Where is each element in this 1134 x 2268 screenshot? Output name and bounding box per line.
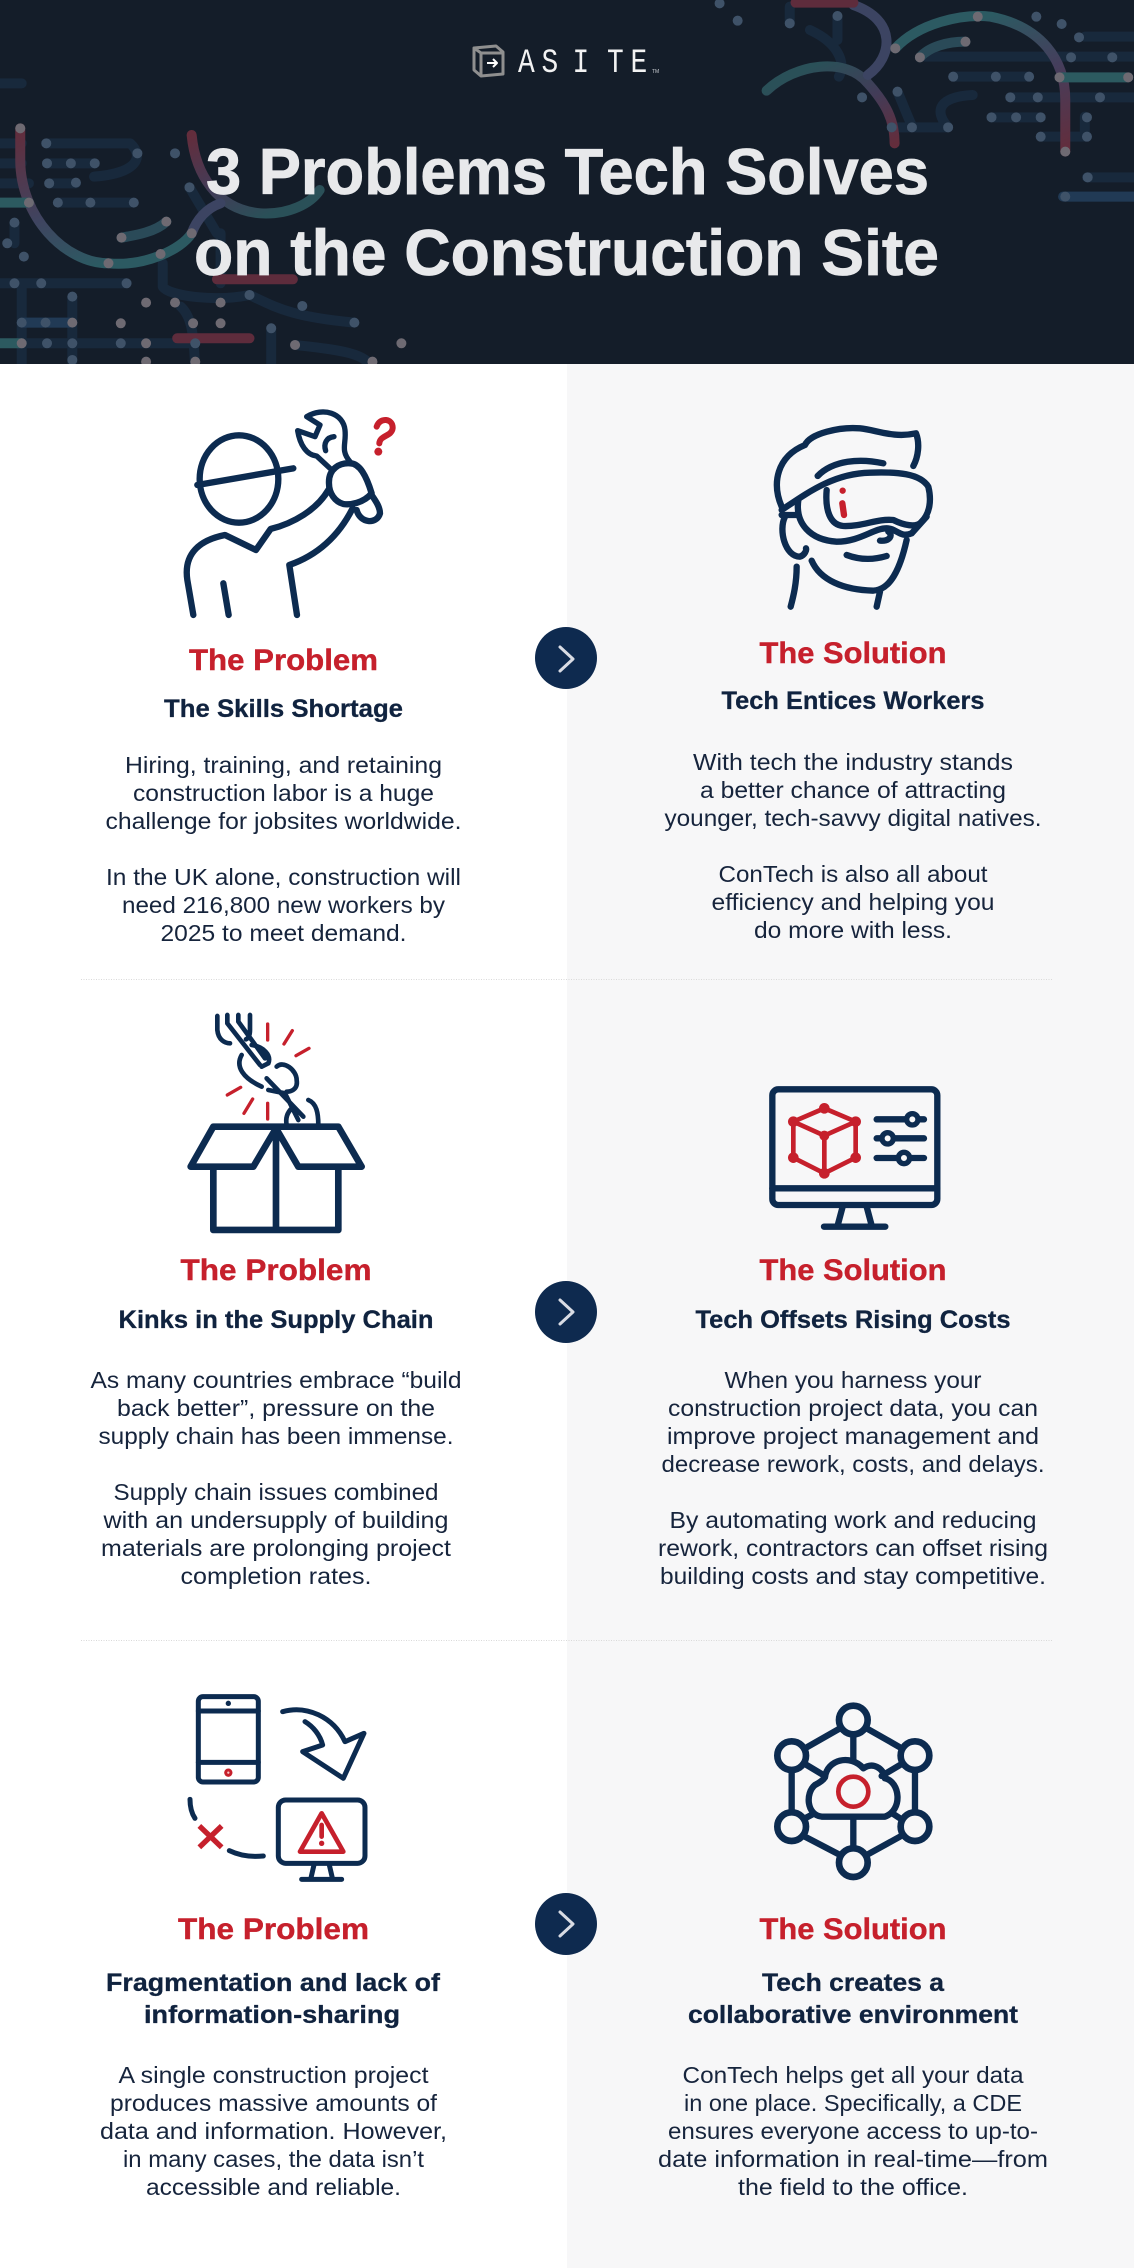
panel: header: [0, 0, 1134, 364]
heading: The Solution: [760, 1254, 946, 1287]
body text: building costs and stay competitive.: [660, 1563, 1046, 1589]
body text: completion rates.: [180, 1563, 372, 1589]
subheading: collaborative environment: [688, 2001, 1019, 2029]
body text: with an undersupply of building: [102, 1507, 448, 1533]
body text: By automating work and reducing: [670, 1507, 1036, 1533]
body text: rework, contractors can offset rising: [658, 1535, 1048, 1561]
body text: [658, 2062, 1048, 2200]
body text: ConTech helps get all your data: [682, 2062, 1024, 2088]
subheading: [688, 1969, 1019, 2029]
heading: The Problem: [178, 1913, 369, 1946]
body text: supply chain has been immense.: [98, 1423, 454, 1449]
panel: right column background: [567, 364, 1134, 2268]
body text: the field to the office.: [738, 2174, 968, 2200]
body text: a better chance of attracting: [700, 777, 1006, 803]
subheading: Tech creates a: [762, 1969, 945, 1997]
body text: [106, 752, 462, 946]
icon: broken chain and box: [191, 1015, 362, 1230]
body text: 2025 to meet demand.: [160, 920, 406, 946]
body text: back better”, pressure on the: [117, 1395, 435, 1421]
body text: [90, 1367, 461, 1589]
body text: younger, tech-savvy digital natives.: [664, 805, 1042, 831]
subheading: information-sharing: [144, 2001, 400, 2029]
heading: The Problem: [180, 1254, 372, 1287]
icon: logo cube: [474, 46, 503, 76]
arrow 3: [535, 1893, 597, 1955]
title: 3 Problems Tech Solves: [206, 135, 929, 208]
body text: in many cases, the data isn’t: [123, 2146, 424, 2172]
body text: When you harness your: [724, 1367, 982, 1393]
body text: decrease rework, costs, and delays.: [662, 1451, 1044, 1477]
body text: accessible and reliable.: [146, 2174, 401, 2200]
title: [194, 135, 939, 289]
icon: tablet, arrow, failed link, alert monitor: [190, 1697, 365, 1879]
subheading: Tech Offsets Rising Costs: [696, 1306, 1010, 1334]
body text: efficiency and helping you: [712, 889, 994, 915]
body text: challenge for jobsites worldwide.: [106, 808, 462, 834]
panel: solution 2: [658, 1089, 1048, 1589]
body text: in one place. Specifically, a CDE: [684, 2090, 1022, 2116]
body text: ConTech is also all about: [718, 861, 988, 887]
icon: monitor with cube and sliders: [772, 1089, 937, 1227]
logo: Asite: I: [572, 45, 589, 83]
logo: Asite: E: [630, 45, 647, 83]
panel: solution 3: [658, 1706, 1048, 2200]
body text: materials are prolonging project: [101, 1535, 451, 1561]
body text: do more with less.: [754, 917, 952, 943]
body text: construction project data, you can: [668, 1395, 1038, 1421]
panel: problem 3: [100, 1697, 447, 2200]
body text: As many countries embrace “build: [90, 1367, 461, 1393]
body text: [658, 1367, 1048, 1589]
body text: data and information. However,: [100, 2118, 447, 2144]
logo: Asite: S: [542, 45, 558, 83]
panel: solution 1: [664, 428, 1042, 943]
body text: improve project management and: [667, 1423, 1039, 1449]
body text: construction labor is a huge: [133, 780, 434, 806]
logo: Asite: TM: [652, 69, 659, 75]
body text: In the UK alone, construction will: [106, 864, 461, 890]
logo: Asite: [474, 45, 659, 83]
subheading: Tech Entices Workers: [722, 687, 984, 715]
body text: ensures everyone access to up-to-: [668, 2118, 1038, 2144]
heading: The Solution: [760, 1913, 946, 1946]
arrow 2: [535, 1281, 597, 1343]
title: on the Construction Site: [194, 216, 939, 289]
subheading: [106, 1969, 441, 2029]
logo: Asite: A: [518, 45, 535, 83]
heading: The Solution: [760, 637, 946, 670]
body text: produces massive amounts of: [110, 2090, 437, 2116]
arrow 1: [535, 627, 597, 689]
subheading: Fragmentation and lack of: [106, 1969, 441, 1997]
panel: problem 2: [90, 1015, 461, 1589]
body text: date information in real-time—from: [658, 2146, 1048, 2172]
body text: [100, 2062, 447, 2200]
icon: worker with VR headset: [777, 428, 930, 607]
subheading: The Skills Shortage: [164, 695, 403, 723]
logo: Asite: T: [607, 45, 624, 83]
subheading: Kinks in the Supply Chain: [118, 1306, 434, 1334]
body text: With tech the industry stands: [693, 749, 1013, 775]
body text: Supply chain issues combined: [114, 1479, 438, 1505]
icon: cloud network: [777, 1706, 929, 1877]
icon: worker with wrench and question mark: [187, 412, 393, 615]
heading: The Problem: [189, 644, 378, 677]
body text: [664, 749, 1042, 943]
body text: Hiring, training, and retaining: [125, 752, 442, 778]
panel: problem 1: [106, 412, 462, 946]
body text: need 216,800 new workers by: [122, 892, 445, 918]
body text: A single construction project: [118, 2062, 429, 2088]
